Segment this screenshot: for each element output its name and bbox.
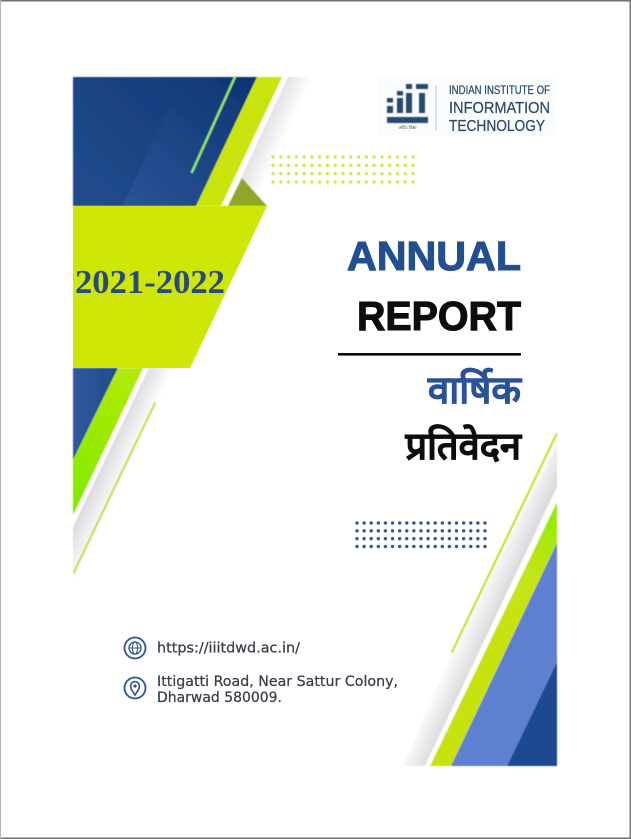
address: Dharwad 580009.: [157, 690, 282, 706]
address: Ittigatti Road, Near Sattur Colony,: [157, 674, 398, 690]
logo divider: [436, 85, 437, 131]
title: annual: ANNUAL: [347, 233, 521, 279]
logo text: TECHNOLOGY: [449, 118, 545, 135]
logo small caption: अटिट विद्या: [398, 124, 417, 130]
hindi title: prativedan: प्रतिवेदन: [404, 424, 523, 468]
lower right geometric shapes: [403, 434, 557, 766]
hindi title: varshik: वार्षिक: [427, 367, 522, 412]
dot grid: navy: [353, 519, 489, 550]
website: https://iiitdwd.ac.in/: [157, 640, 300, 656]
top left geometric shapes: [73, 77, 315, 206]
title rule: [338, 353, 521, 356]
lower left geometric shapes: [73, 368, 175, 582]
logo text: INFORMATION: [449, 100, 550, 117]
icon: globe: [124, 638, 146, 658]
year label: 2021-2022: [75, 264, 225, 301]
logo text: [449, 85, 550, 135]
logo mark: [387, 84, 428, 123]
icon: location pin: [124, 678, 146, 698]
year banner: [73, 206, 267, 368]
institute logo: [378, 76, 556, 136]
dot grid: lime: [269, 153, 417, 186]
address: [157, 674, 398, 706]
title: report: REPORT: [357, 293, 521, 339]
logo text: INDIAN INSTITUTE OF: [449, 85, 550, 97]
